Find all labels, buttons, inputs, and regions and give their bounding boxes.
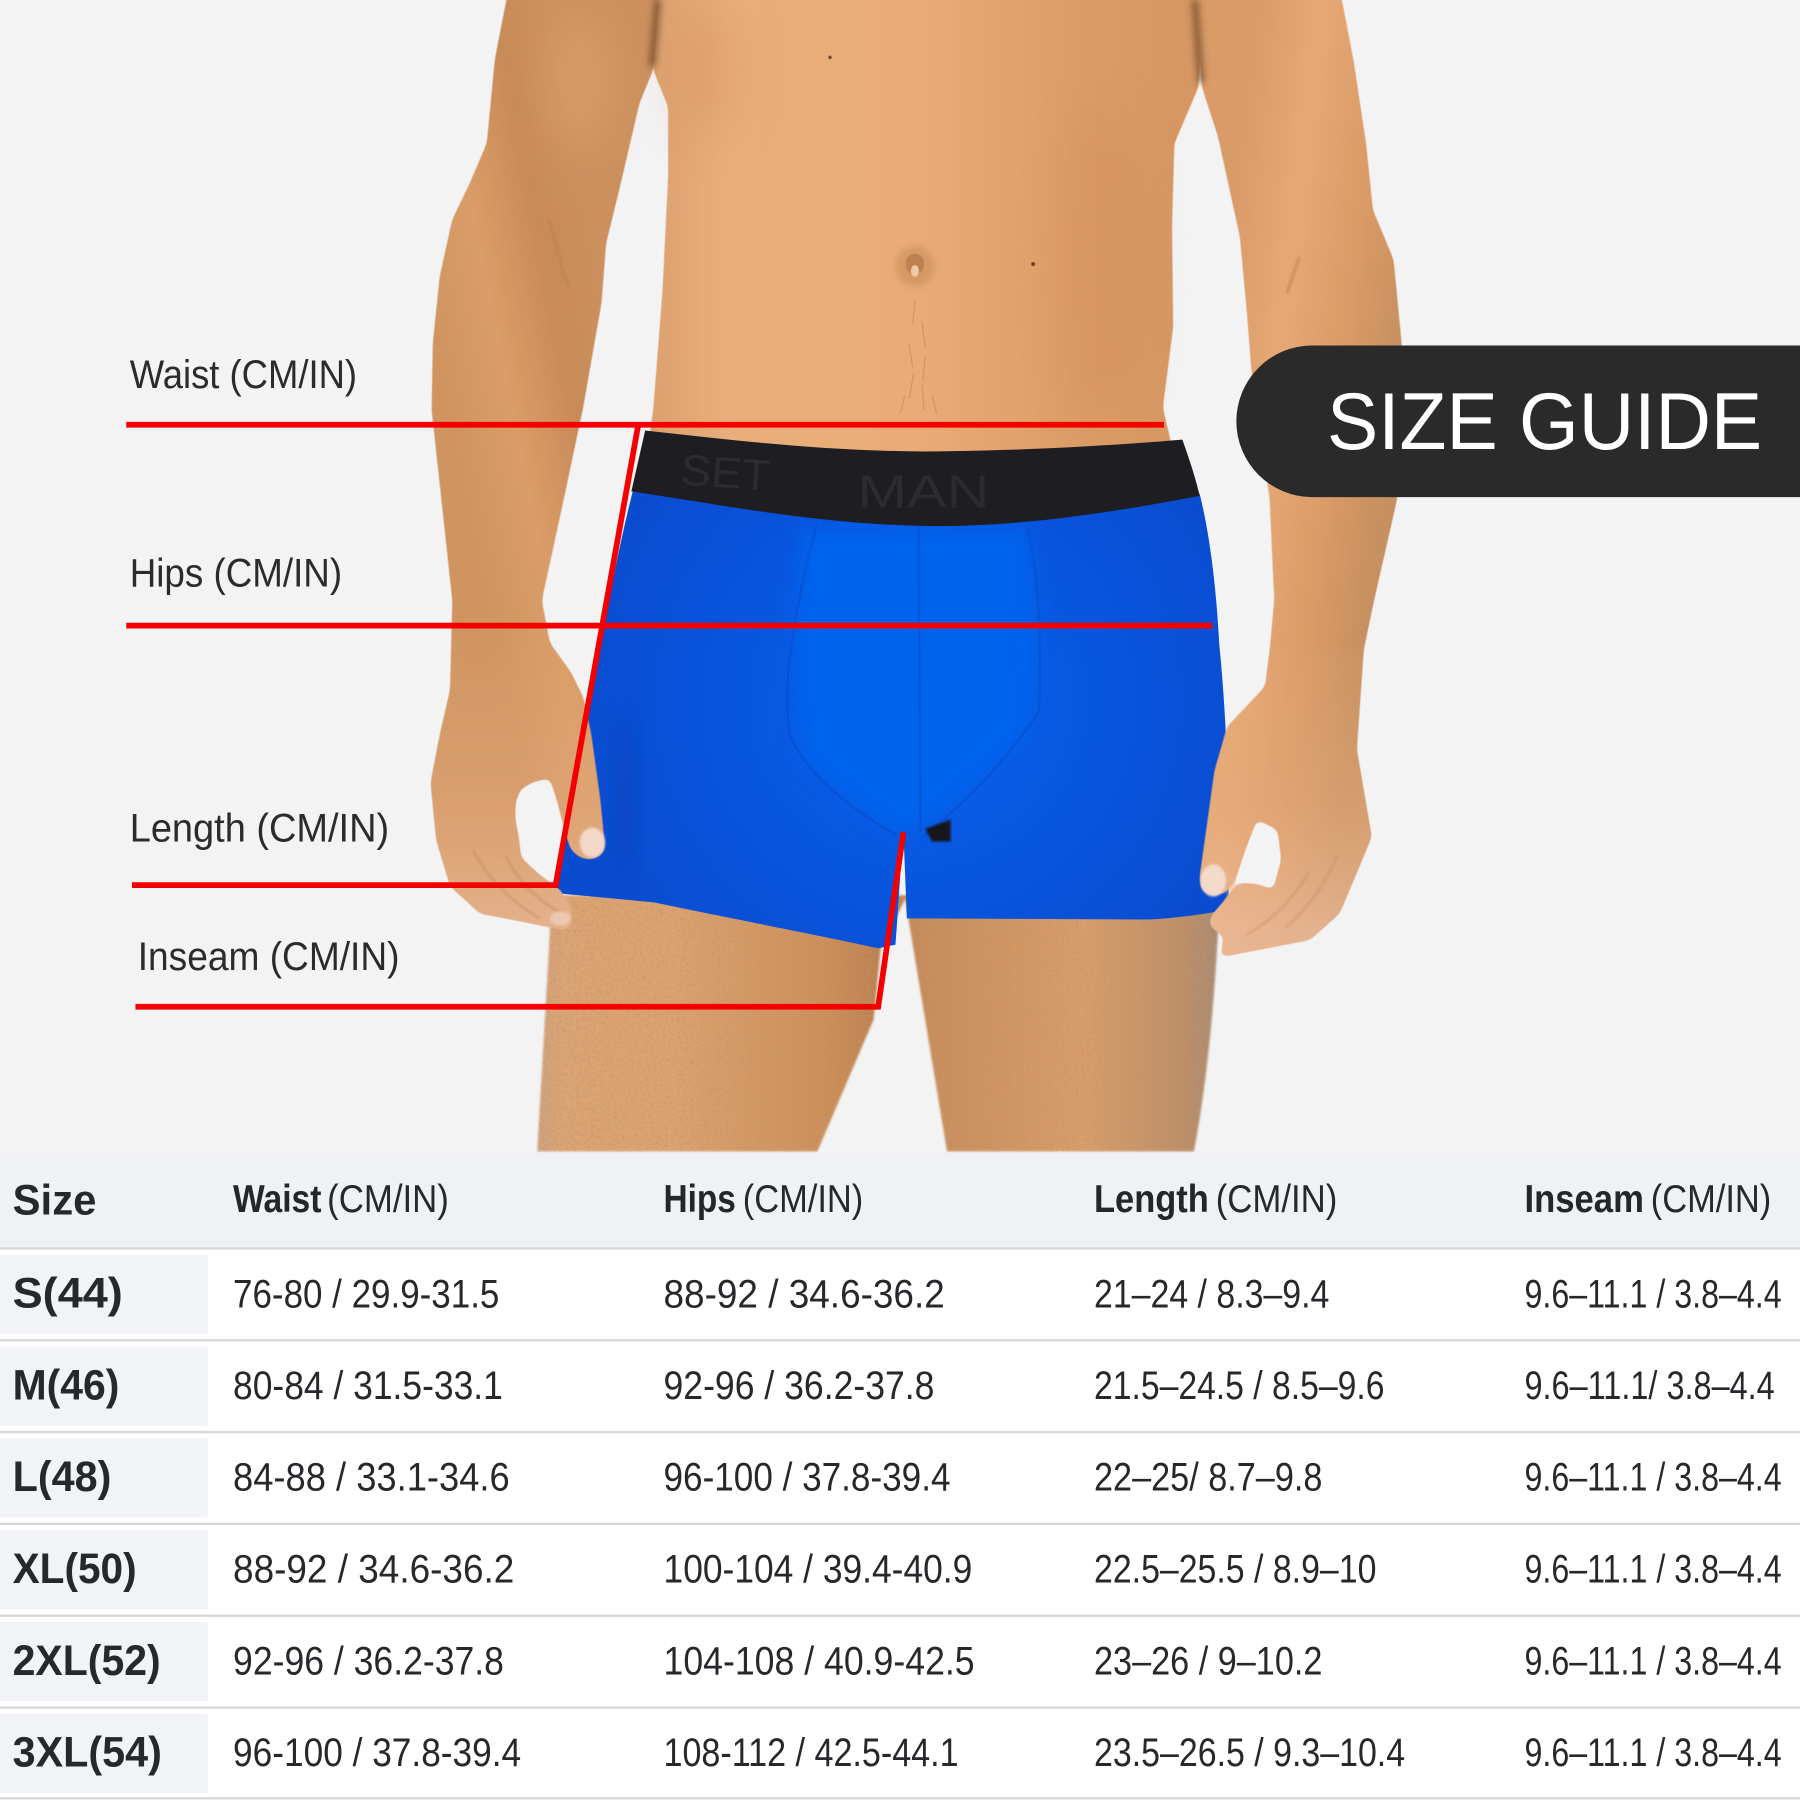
row: XL(50) — [0, 1530, 1782, 1609]
shorts: MAN — [858, 465, 990, 517]
row: XL(50): 100-104 / 39.4-40.9 — [664, 1546, 972, 1591]
row: XL(50): 22.5–25.5 / 8.9–10 — [1094, 1546, 1376, 1591]
waist line — [126, 422, 1164, 427]
right arm and hand — [1194, 0, 1403, 957]
row: 3XL(54) — [0, 1714, 1782, 1793]
table header: Waist — [233, 1178, 321, 1221]
row: 3XL(54): 3XL(54) — [13, 1729, 162, 1776]
row: M(46): M(46) — [13, 1361, 119, 1408]
row: 2XL(52): 23–26 / 9–10.2 — [1094, 1638, 1322, 1683]
table header: (CM/IN) — [743, 1178, 863, 1221]
row: L(48): 96-100 / 37.8-39.4 — [664, 1455, 951, 1500]
leg hair texture — [537, 895, 1219, 1151]
body shading — [672, 0, 1143, 425]
table header: (CM/IN) — [1651, 1178, 1771, 1221]
row: M(46): 80-84 / 31.5-33.1 — [233, 1363, 503, 1408]
table header: Hips — [664, 1178, 736, 1221]
forearm vein — [1287, 257, 1299, 294]
finger creases — [473, 849, 560, 918]
label: hips: Hips (CM/IN) — [130, 551, 342, 596]
navel — [895, 246, 934, 287]
row: 2XL(52): 92-96 / 36.2-37.8 — [233, 1638, 504, 1683]
label: length: Length (CM/IN) — [130, 805, 389, 850]
armpit folds — [652, 0, 1201, 83]
moles — [828, 56, 832, 59]
table header: Inseam — [1524, 1178, 1644, 1221]
pouch highlight — [795, 528, 1036, 832]
row: 2XL(52): 104-108 / 40.9-42.5 — [664, 1638, 975, 1683]
hips line — [126, 623, 1212, 628]
finger creases — [1246, 855, 1337, 936]
row: 3XL(54): 108-112 / 42.5-44.1 — [664, 1730, 959, 1775]
label: waist: Waist (CM/IN) — [130, 352, 357, 397]
legs — [537, 895, 1219, 1151]
row: S(44): 21–24 / 8.3–9.4 — [1094, 1272, 1329, 1317]
row: M(46): 92-96 / 36.2-37.8 — [664, 1363, 934, 1408]
row: L(48): L(48) — [13, 1453, 111, 1500]
left thumbnail — [580, 828, 605, 858]
label: inseam: Inseam (CM/IN) — [138, 934, 399, 979]
thumb shadow — [614, 712, 637, 872]
inseam line — [135, 832, 903, 1007]
background — [0, 0, 1800, 1153]
row: M(46): 21.5–24.5 / 8.5–9.6 — [1094, 1363, 1384, 1408]
waistband — [631, 430, 1200, 526]
row: 3XL(54): 23.5–26.5 / 9.3–10.4 — [1094, 1730, 1405, 1775]
measurement lines — [126, 425, 1212, 1007]
table header: (CM/IN) — [1216, 1178, 1337, 1221]
row: 2XL(52): 2XL(52) — [13, 1637, 161, 1684]
row: L(48): 22–25/ 8.7–9.8 — [1094, 1455, 1322, 1500]
crotch tag — [925, 820, 951, 841]
row: XL(50): XL(50) — [13, 1545, 137, 1592]
row: S(44): S(44) — [13, 1270, 123, 1317]
row: L(48) — [0, 1438, 1782, 1518]
right thumbnail — [1201, 864, 1226, 897]
row: M(46) — [0, 1347, 1775, 1426]
table header: Size — [13, 1177, 96, 1224]
title: SIZE GUIDE — [1327, 377, 1762, 467]
model photo illustration — [430, 0, 1403, 1151]
left fingertip — [550, 911, 571, 925]
row: S(44) — [0, 1255, 1782, 1334]
row: XL(50): 88-92 / 34.6-36.2 — [233, 1546, 514, 1591]
table header — [0, 1153, 1800, 1248]
torso — [643, 0, 1205, 482]
row: L(48): 84-88 / 33.1-34.6 — [233, 1455, 510, 1500]
size table — [0, 1153, 1800, 1800]
row: 3XL(54): 96-100 / 37.8-39.4 — [233, 1730, 521, 1775]
seams — [787, 522, 1040, 836]
forearm vein — [549, 218, 569, 287]
title badge — [1236, 346, 1800, 497]
left arm and hand — [430, 0, 660, 930]
measurement labels — [130, 352, 399, 979]
belly hair — [900, 301, 937, 414]
shorts — [556, 430, 1229, 948]
table header: (CM/IN) — [327, 1178, 449, 1221]
row: S(44): 76-80 / 29.9-31.5 — [233, 1272, 499, 1317]
row: S(44): 88-92 / 34.6-36.2 — [664, 1272, 945, 1317]
row: 2XL(52) — [0, 1622, 1782, 1701]
table header: Length — [1094, 1178, 1209, 1221]
upper arm highlight — [550, 11, 610, 149]
waistband brand text: SET — [679, 447, 772, 501]
length line — [132, 425, 638, 885]
